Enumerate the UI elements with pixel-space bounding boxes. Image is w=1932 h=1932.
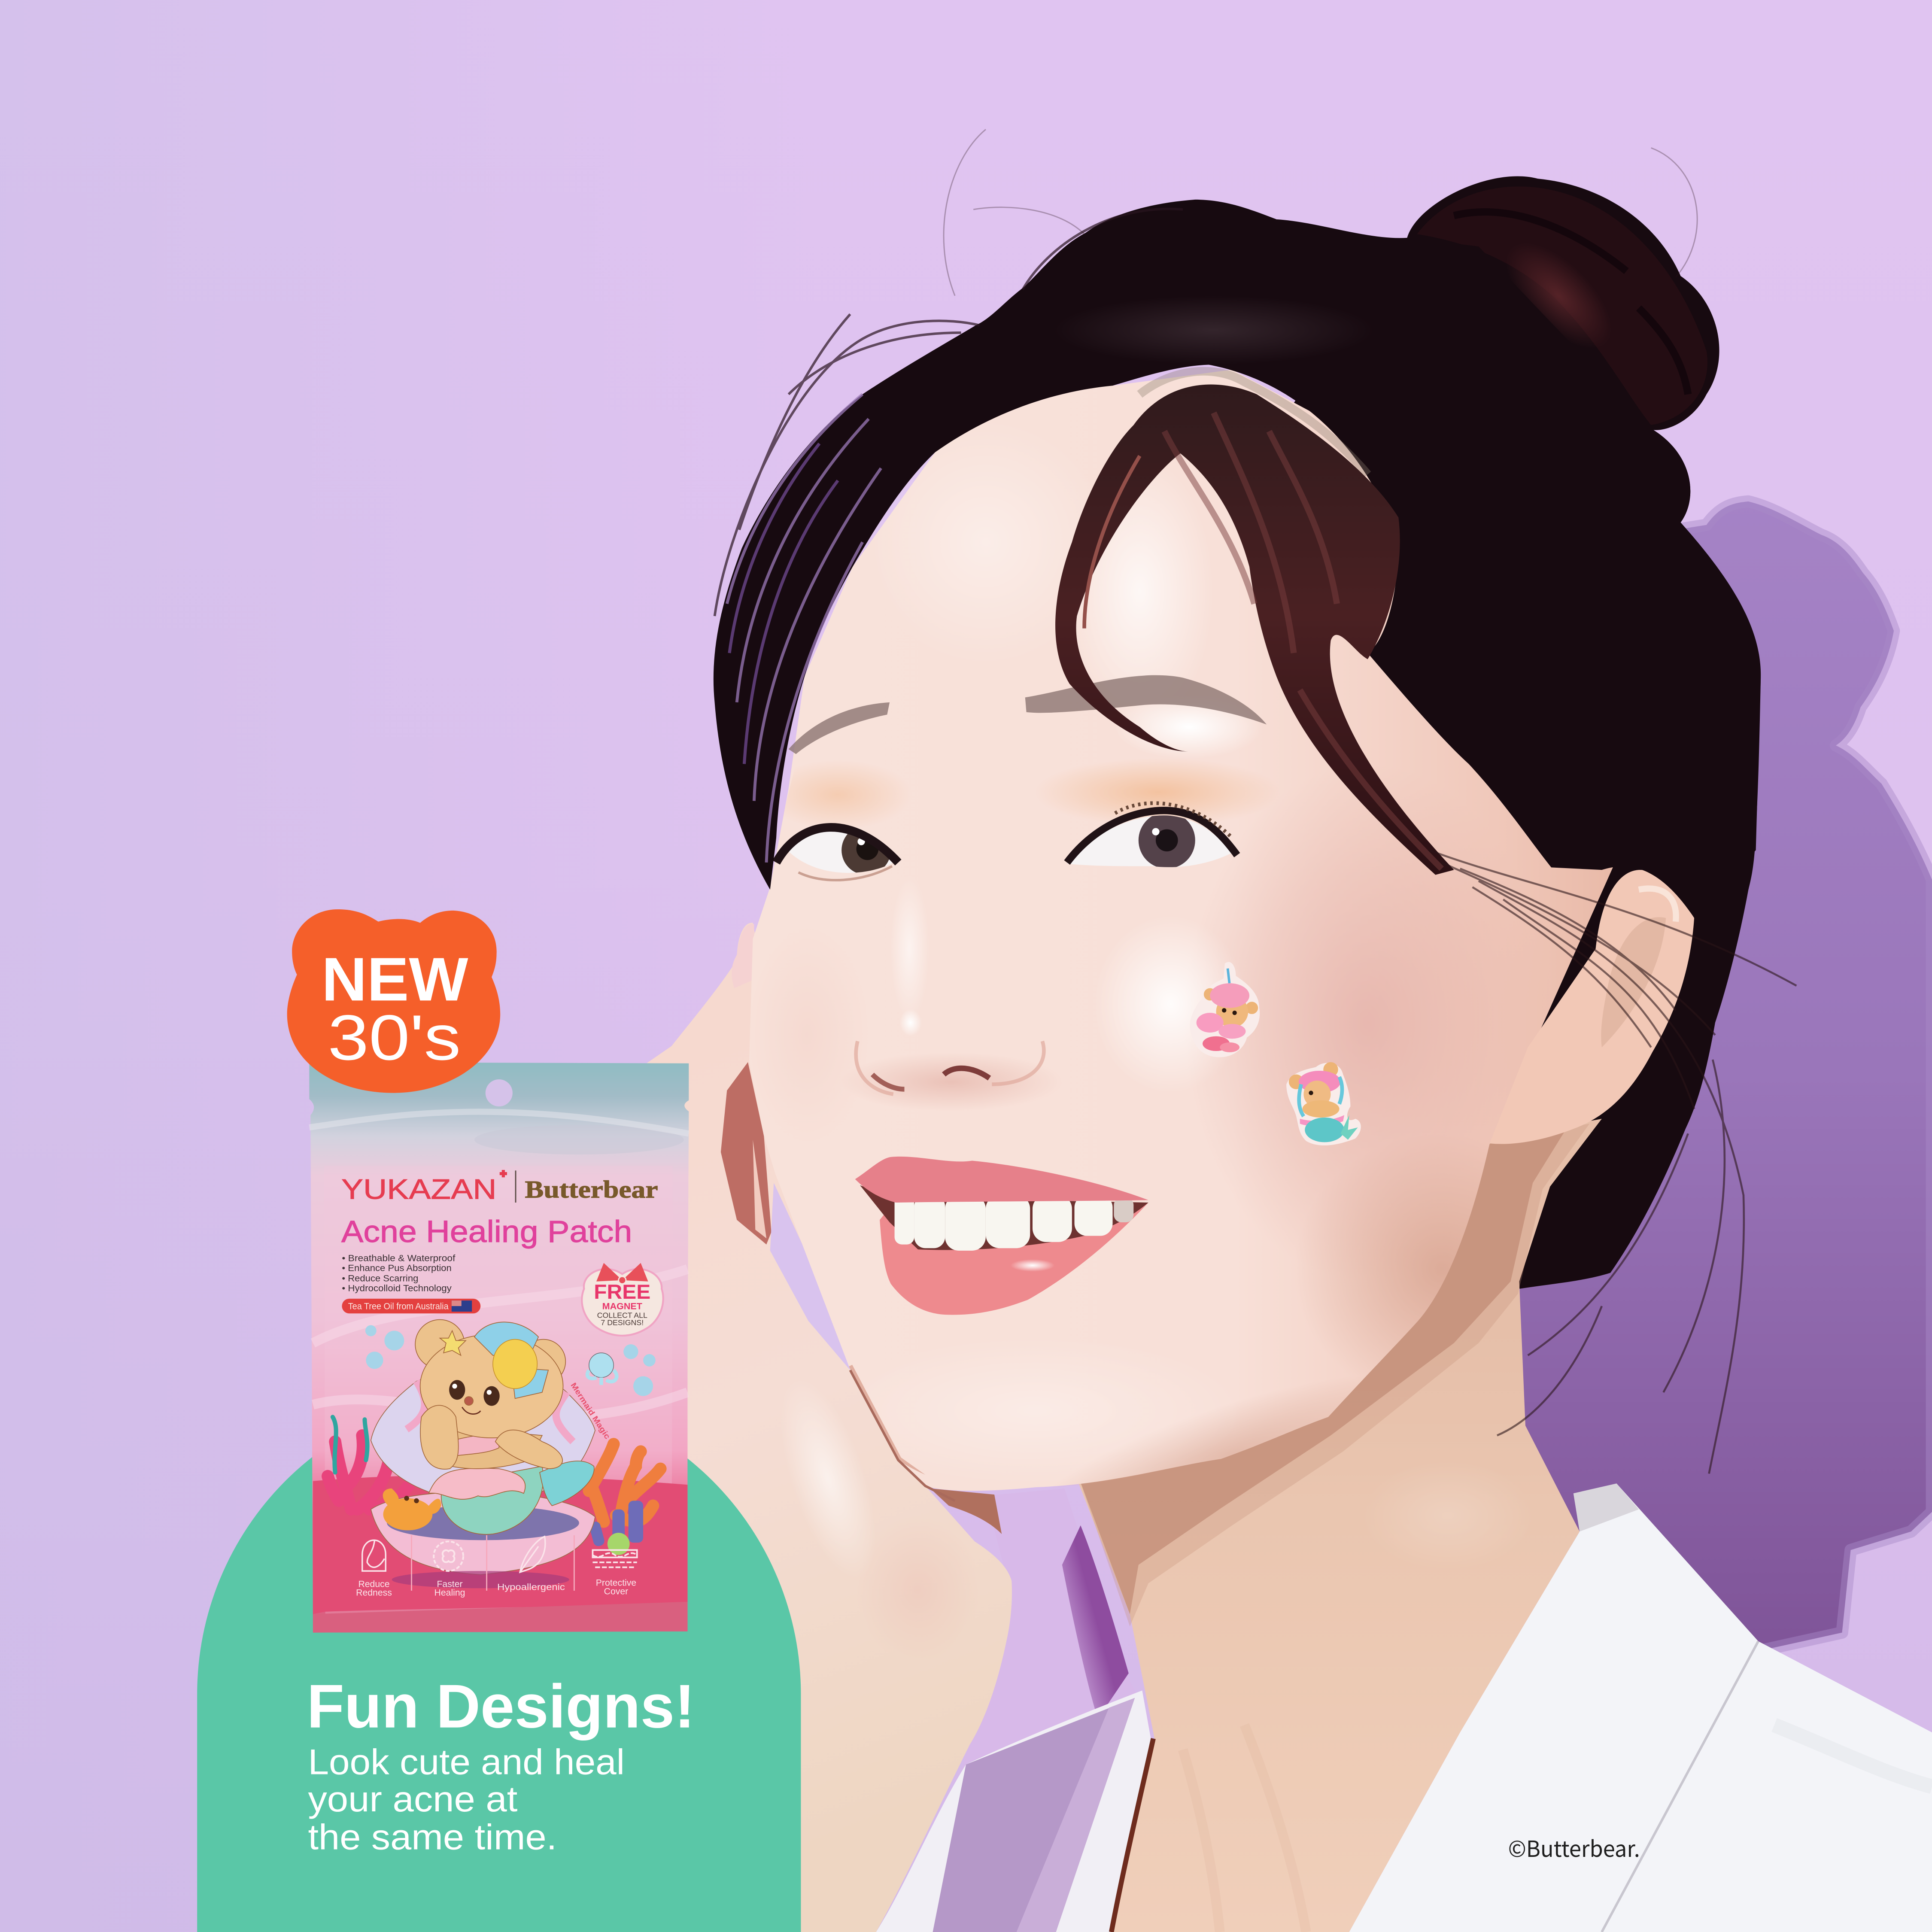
- feature bullet list: • Enhance Pus Absorption: [342, 1263, 452, 1273]
- wall gap behind neck: [949, 1488, 1152, 1811]
- hair bun: [1417, 186, 1707, 425]
- face: [745, 370, 1613, 1565]
- free magnet badge: MAGNET: [602, 1301, 642, 1311]
- copyright credit: ©Butterbear.: [1508, 1831, 1640, 1863]
- jaw crease on hand: [850, 1370, 955, 1501]
- feature bullet list: • Reduce Scarring: [342, 1273, 418, 1284]
- free magnet badge: 7 DESIGNS!: [601, 1318, 644, 1327]
- left shirt lapel: [876, 1691, 1153, 1932]
- badge text new: NEW: [322, 945, 468, 1014]
- hair part line: [1140, 371, 1368, 474]
- purple wall shadow strip: [1062, 1525, 1129, 1719]
- jellyfish: [587, 1353, 617, 1385]
- orange crab: [383, 1488, 441, 1530]
- body text: the same time.: [308, 1817, 557, 1857]
- neck: [1072, 1119, 1602, 1932]
- under-chin shadow: [930, 1488, 1002, 1534]
- starfish: [440, 1331, 466, 1355]
- free magnet badge: FREE: [594, 1281, 650, 1303]
- bear head: [420, 1334, 563, 1438]
- benefit labels: Faster: [437, 1579, 463, 1589]
- nose: [840, 875, 1062, 1112]
- benefit dividers: [412, 1535, 574, 1591]
- head shadow on wall: [1479, 501, 1932, 1651]
- pack lower red band: [313, 1475, 687, 1614]
- benefit icon: leaf: [520, 1537, 545, 1572]
- blue bow: [474, 1322, 548, 1398]
- benefit icon: face: [362, 1540, 386, 1571]
- bear skirt: [429, 1468, 525, 1499]
- brand logo yukazan: YUKAZAN: [341, 1173, 497, 1205]
- benefit labels: Protective: [596, 1578, 636, 1588]
- pack body: [309, 1062, 689, 1633]
- heading: Fun Designs!: [307, 1672, 695, 1741]
- mermaid bear character: [415, 1320, 594, 1534]
- green arch panel: [197, 1392, 801, 1932]
- lips and smile: [855, 1157, 1148, 1315]
- bear arms: [420, 1405, 459, 1469]
- photo of smiling woman: [616, 129, 1932, 1932]
- feature bullet list: • Breathable & Waterproof: [342, 1253, 456, 1263]
- feature bullet list: [342, 1253, 456, 1294]
- right coral: [589, 1444, 660, 1555]
- front hair: [714, 200, 1761, 918]
- product pack: [309, 1062, 689, 1633]
- benefit labels: Hypoallergenic: [497, 1583, 565, 1592]
- bubbles: [365, 1325, 656, 1396]
- bear ears: [415, 1320, 465, 1369]
- body text: Look cute and heal: [308, 1742, 625, 1782]
- bear body: [425, 1417, 542, 1469]
- free magnet badge: COLLECT ALL: [597, 1311, 647, 1319]
- right eye: [1067, 803, 1237, 869]
- bangs: [1055, 384, 1454, 875]
- bear eyes: [449, 1380, 500, 1406]
- hand: [616, 923, 1012, 1932]
- brand logo butterbear: Butterbear: [525, 1176, 658, 1203]
- shaded gap between fingers: [721, 1062, 772, 1245]
- tea tree oil pill: [342, 1299, 480, 1313]
- clam shell: [371, 1371, 595, 1588]
- lilac gap between hand and face: [770, 1183, 850, 1370]
- eyebrows: [789, 675, 1267, 754]
- bear nose: [465, 1397, 473, 1405]
- tagline mermaid magic: Mermaid Magic: [569, 1381, 612, 1441]
- ear: [1490, 870, 1694, 1144]
- flyaway hair strands: [944, 129, 1796, 1473]
- feature bullet list: • Hydrocolloid Technology: [342, 1283, 452, 1294]
- core under-jaw shadow: [1077, 1131, 1565, 1614]
- benefit labels: [356, 1578, 636, 1598]
- benefit icon: healing: [434, 1541, 463, 1571]
- body text: [308, 1742, 625, 1857]
- free magnet badge: [582, 1263, 663, 1336]
- benefit labels: Cover: [604, 1587, 628, 1597]
- bear-shaped new badge: [287, 909, 500, 1093]
- badge text 30s: 30's: [328, 1002, 461, 1073]
- yellow shell: [493, 1340, 537, 1388]
- soft outer under-jaw shadow: [1077, 1124, 1589, 1626]
- benefit labels: Reduce: [358, 1579, 390, 1589]
- benefit labels: Redness: [356, 1588, 392, 1598]
- tea tree oil pill: Tea Tree Oil from Australia: [348, 1301, 449, 1311]
- logo plus flower: [500, 1170, 507, 1177]
- product name: Acne Healing Patch: [341, 1215, 632, 1249]
- benefit labels: Healing: [434, 1588, 465, 1598]
- left eye: [776, 826, 898, 880]
- sticker: mermaid bear: [1286, 1062, 1361, 1145]
- benefit icon: cover: [592, 1550, 637, 1567]
- left coral: [328, 1417, 409, 1510]
- right shirt collar: [1349, 1483, 1932, 1932]
- bear tail: [441, 1461, 594, 1534]
- sticker: cotton candy bear: [1190, 962, 1260, 1057]
- body text: your acne at: [308, 1779, 517, 1819]
- back hair: [1232, 176, 1761, 1289]
- teeth: [895, 1195, 1133, 1251]
